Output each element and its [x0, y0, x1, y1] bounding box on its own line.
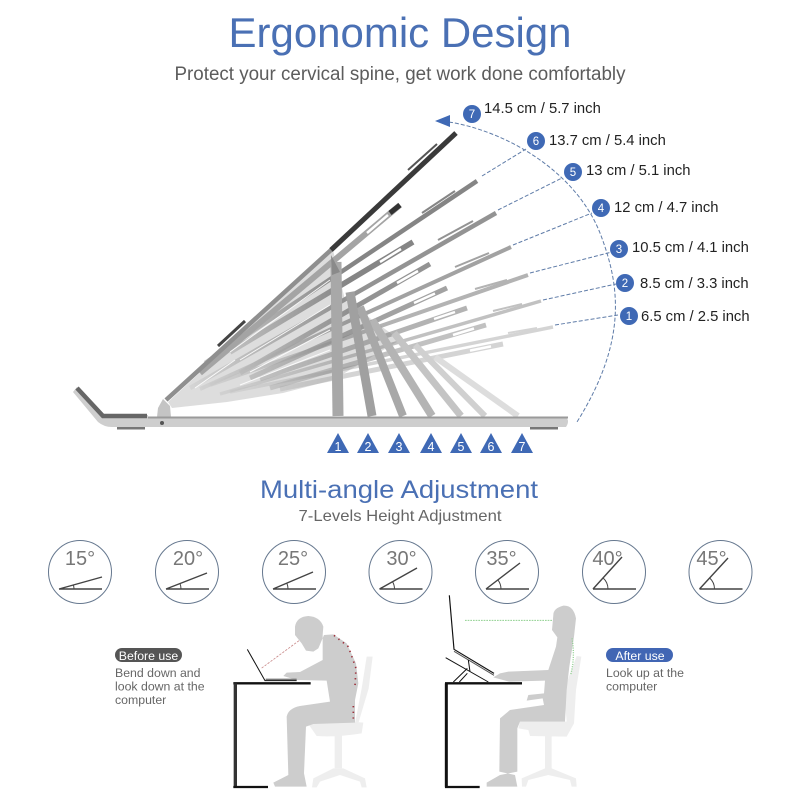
- angle 25: [262, 540, 326, 604]
- height 4: 12 cm / 4.7 inch: [614, 200, 718, 216]
- level sight line: [465, 619, 552, 622]
- numbered leg position triangles: 5: [458, 440, 465, 454]
- height 6: 6: [533, 136, 539, 148]
- angle icons row: [48, 540, 752, 604]
- height 1: 1: [626, 311, 632, 323]
- numbered leg position triangles: 6: [488, 440, 495, 454]
- numbered leg position triangles: 2: [365, 440, 372, 454]
- height 6: 13.7 cm / 5.4 inch: [549, 133, 666, 149]
- angle 45: [689, 540, 752, 604]
- height 4: 4: [598, 203, 605, 215]
- angle 30: [369, 540, 432, 604]
- angle 40: [582, 540, 646, 604]
- numbered leg position triangles: 7: [519, 440, 526, 454]
- laptop and desk: [233, 649, 311, 787]
- panel position 4: [200, 247, 511, 389]
- seated person bent forward: [273, 616, 358, 787]
- office chair: [518, 656, 581, 787]
- subtitle: Protect your cervical spine, get work done comfortably: [174, 64, 626, 85]
- title: Ergonomic Design: [228, 9, 572, 56]
- panel position 6: [205, 181, 477, 363]
- support legs: [331, 255, 518, 416]
- callout: before use: [115, 648, 205, 707]
- sight line: [261, 641, 299, 668]
- office chair: [308, 657, 373, 787]
- panel position 3: [210, 275, 528, 385]
- angle 25: 25°: [278, 548, 308, 570]
- callout: after use: After use: [615, 649, 665, 663]
- height 7: 7: [469, 109, 475, 121]
- angle 35: [476, 540, 538, 604]
- seated person upright: [487, 606, 576, 787]
- height 3: 10.5 cm / 4.1 inch: [632, 240, 749, 256]
- fan shading where panels overlap: [168, 250, 400, 408]
- callout: before use: Before use: [119, 649, 178, 663]
- illustration: posture before use: [233, 616, 373, 787]
- illustration: posture after use: [445, 595, 581, 787]
- callout: after use: [606, 648, 684, 694]
- stand panel positions: [166, 133, 553, 400]
- angle 40: 40°: [592, 548, 623, 570]
- callout: after use: computer: [606, 680, 657, 694]
- angle 45: 45°: [696, 548, 727, 570]
- dashed height arc with arrow: [435, 115, 618, 422]
- height 7: 14.5 cm / 5.7 inch: [484, 101, 601, 117]
- spine curve: [334, 635, 356, 722]
- panel position 2: [220, 301, 541, 394]
- height 5: 13 cm / 5.1 inch: [586, 163, 690, 179]
- height 1: 6.5 cm / 2.5 inch: [641, 309, 750, 325]
- panel position 7: [166, 133, 456, 400]
- section subheading: 7-Levels Height Adjustment: [298, 508, 502, 525]
- callout: before use: computer: [115, 693, 166, 707]
- metal highlights: [195, 280, 330, 388]
- callout: before use: look down at the: [115, 680, 205, 694]
- laptop on stand and desk: [445, 595, 522, 787]
- height 2: 2: [622, 278, 628, 290]
- height 5: 5: [570, 167, 576, 179]
- straight spine: [571, 638, 573, 675]
- angle 20: 20°: [173, 548, 203, 570]
- panel position 1: [230, 327, 553, 392]
- callout: after use: Look up at the: [606, 666, 684, 680]
- numbered leg position triangles: 3: [396, 440, 403, 454]
- numbered leg position triangles: 1: [335, 440, 342, 454]
- stand base: [73, 387, 568, 430]
- panel position 5: [190, 213, 496, 388]
- angle 15: [48, 540, 112, 604]
- chart: laptop stand height positions: [73, 101, 750, 454]
- section heading: Multi-angle Adjustment: [260, 476, 538, 504]
- callout: before use: Bend down and: [115, 666, 201, 680]
- height 2: 8.5 cm / 3.3 inch: [640, 276, 749, 292]
- height labels: [463, 101, 750, 325]
- numbered leg position triangles: 4: [428, 440, 435, 454]
- height 3: 3: [616, 244, 622, 256]
- height 7: [463, 101, 601, 123]
- angle 35: 35°: [486, 548, 517, 570]
- angle 15: 15°: [65, 548, 95, 570]
- numbered leg position triangles: [327, 433, 533, 454]
- angle 30: 30°: [386, 548, 417, 570]
- angle 20: [156, 540, 218, 604]
